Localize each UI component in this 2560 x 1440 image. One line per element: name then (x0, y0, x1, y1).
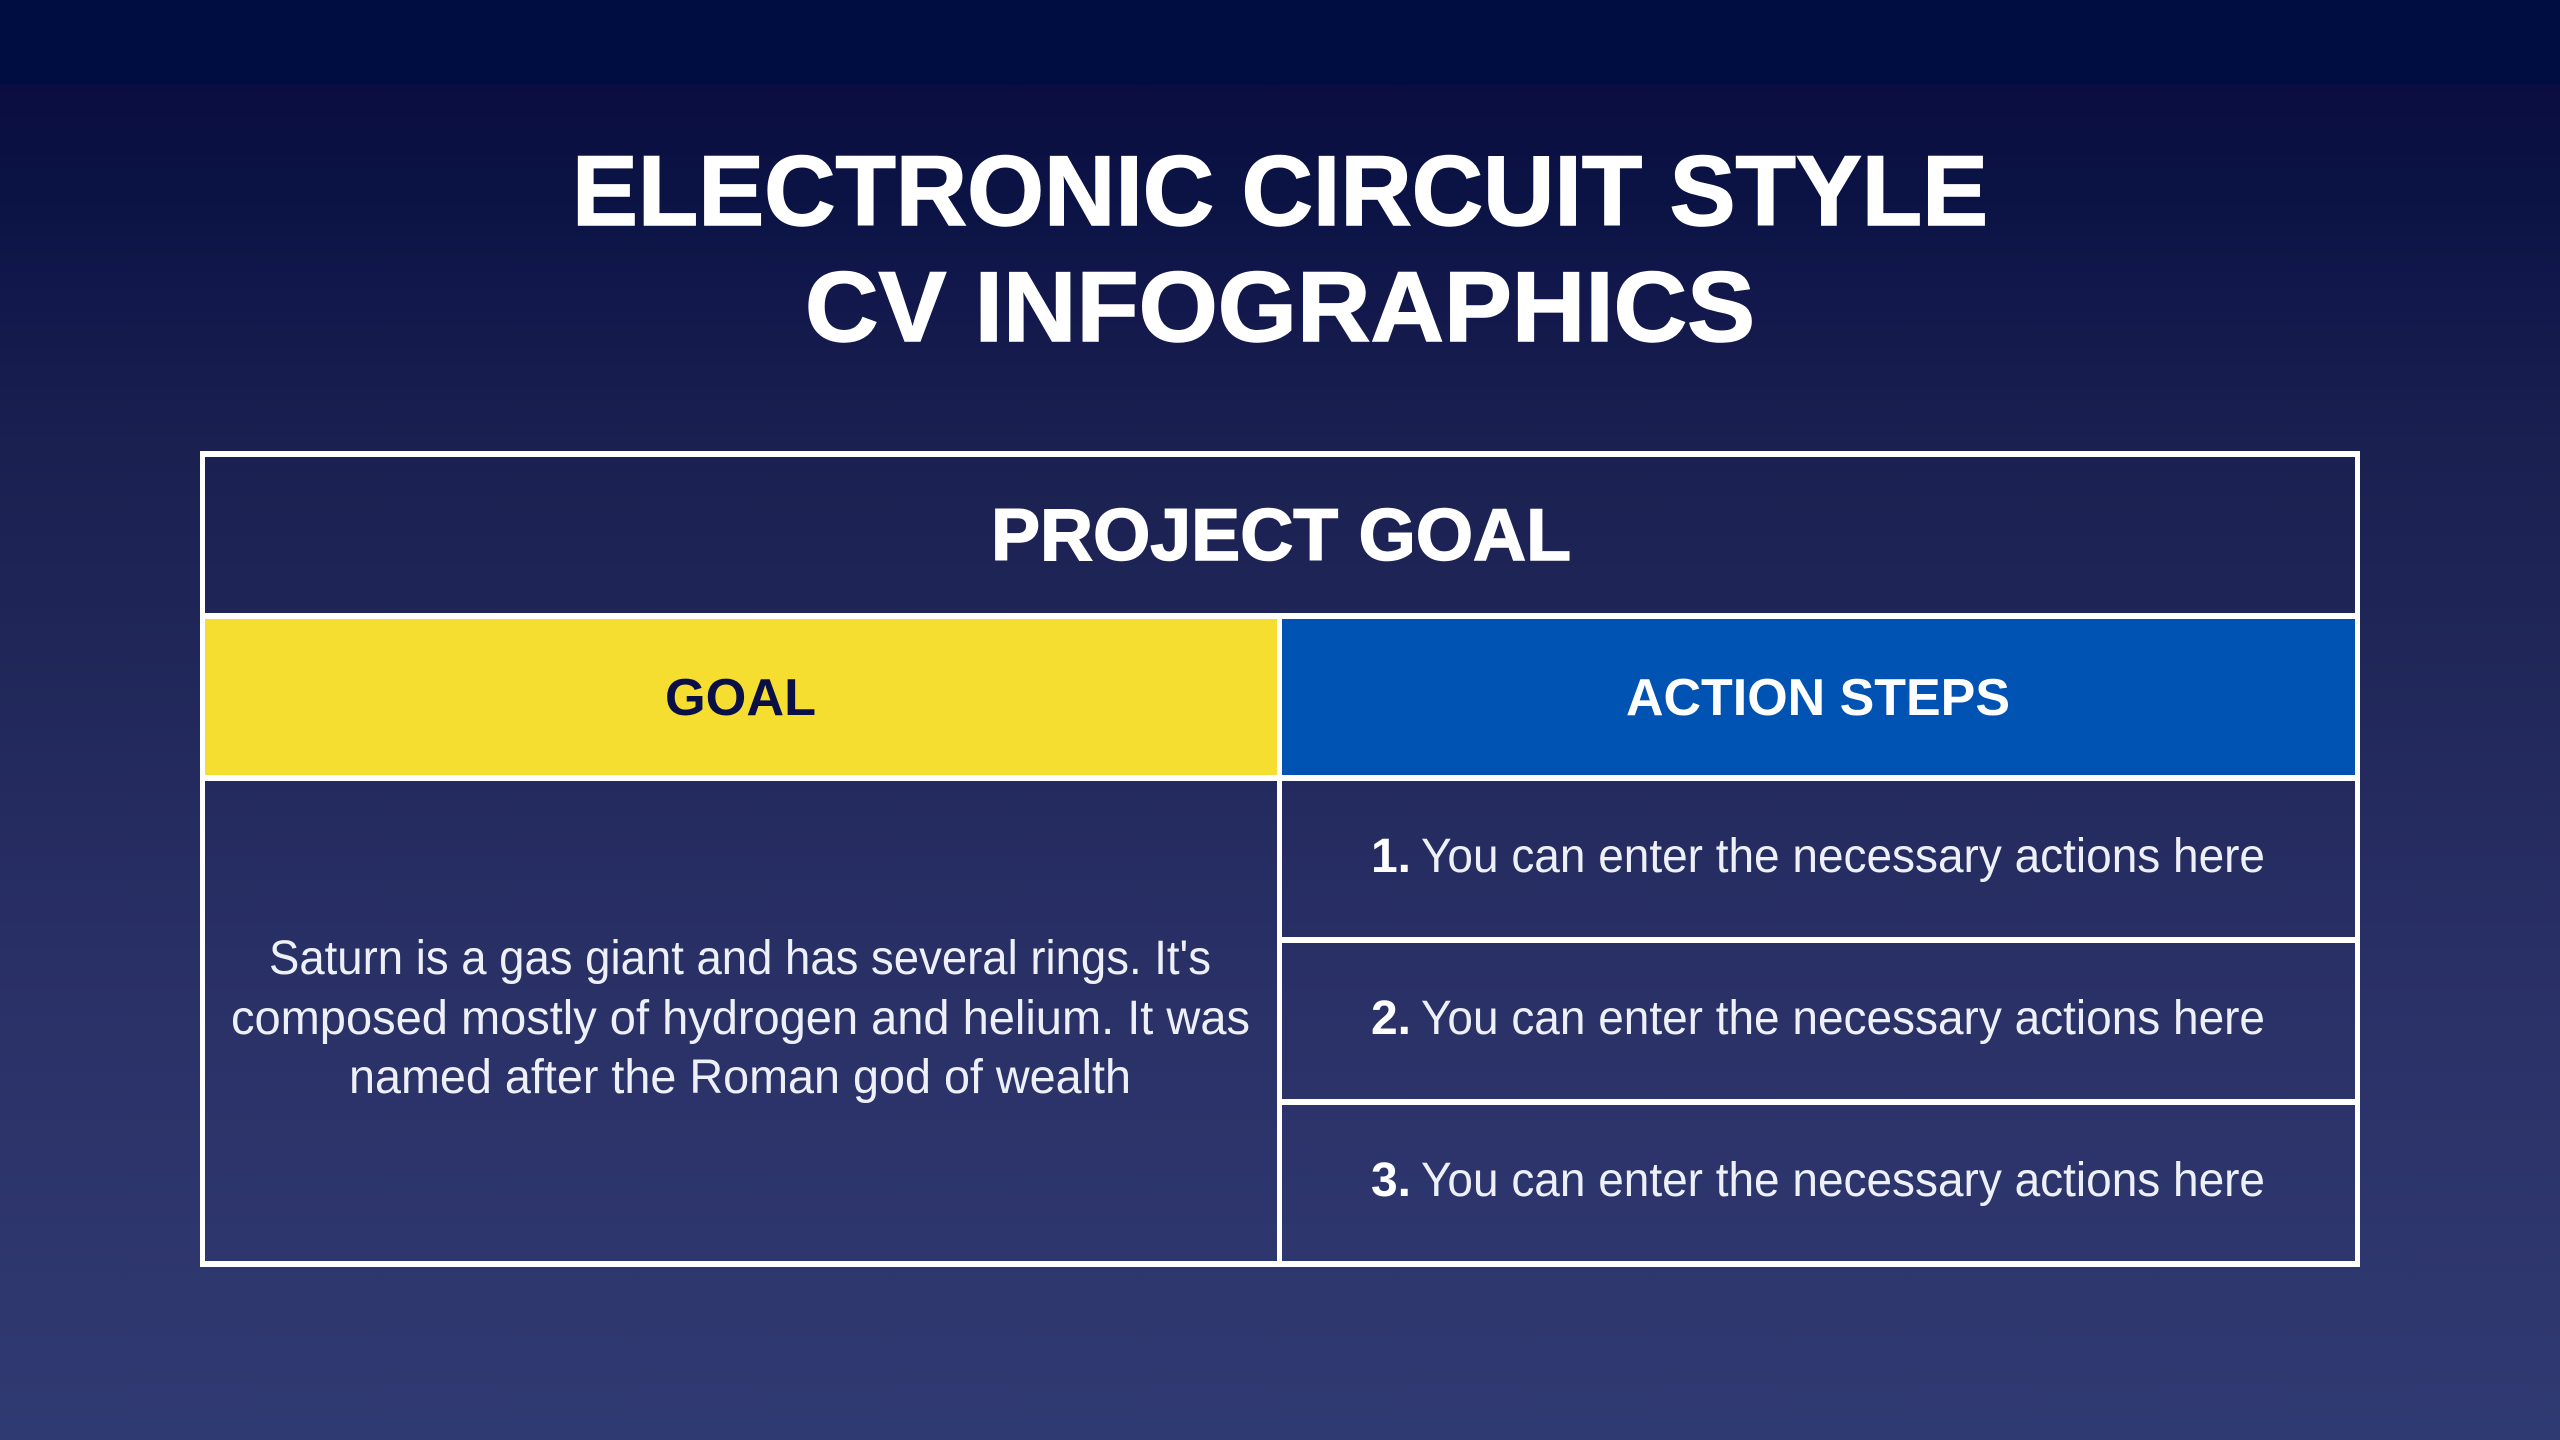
table grid lines (200, 451, 2360, 1267)
table heading: project goal: PROJECT GOAL (991, 495, 1571, 576)
title: ELECTRONIC CIRCUIT STYLE (572, 135, 1988, 246)
goal description text: Saturn is a gas giant and has several rings. It's (269, 932, 1211, 985)
goal description text: composed mostly of hydrogen and helium. It was (231, 992, 1250, 1045)
column heading: action steps: ACTION STEPS (1626, 669, 2010, 727)
action step 3: 3. (1371, 1154, 1411, 1207)
action step 2: You can enter the necessary actions here (1421, 992, 2265, 1045)
goal description text (231, 932, 1250, 1104)
action steps header cell (1280, 618, 2357, 778)
action step 3: You can enter the necessary actions here (1421, 1154, 2265, 1207)
column heading: goal: GOAL (665, 669, 816, 727)
goal description text: named after the Roman god of wealth (349, 1051, 1131, 1104)
action step 1: You can enter the necessary actions here (1421, 830, 2265, 883)
action step 2: 2. (1371, 992, 1411, 1045)
goal header cell (203, 618, 1280, 778)
title (572, 135, 1988, 362)
action step 1: 1. (1371, 830, 1411, 883)
table (200, 451, 2360, 1267)
title: CV INFOGRAPHICS (805, 251, 1755, 362)
